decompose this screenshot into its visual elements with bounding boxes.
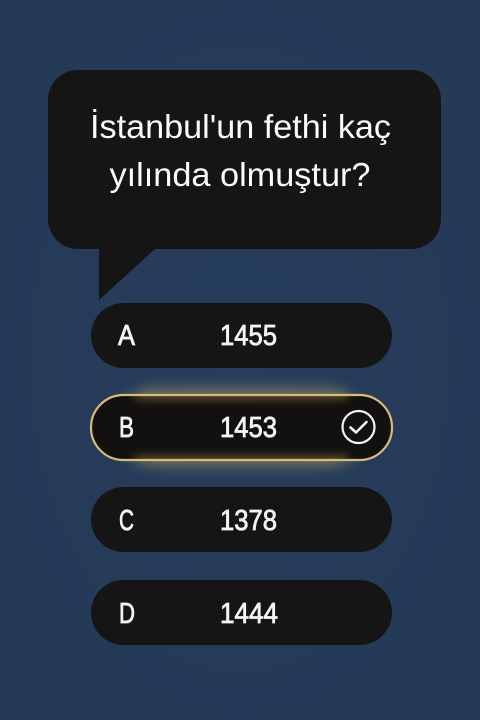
option A: 1455 [220,320,277,352]
speech bubble [48,70,441,300]
option C [91,487,392,552]
gold border [91,395,392,460]
option B: correct answer: B [119,412,134,444]
option A [91,303,392,368]
outer glow [120,388,363,466]
option A: A [118,320,136,352]
option C: 1378 [220,505,277,537]
option D [91,580,392,645]
question text: İstanbul'un fethi kaç [90,108,391,145]
pill [91,395,392,460]
option D: D [119,598,135,630]
question text [90,108,391,193]
question text: yılında olmuştur? [110,156,370,193]
bubble body with tail [48,70,441,300]
option B: correct answer [91,388,392,466]
option D: 1444 [220,598,278,630]
option C: C [119,505,134,537]
icon: check mark in circle [342,411,374,443]
inner glow [130,396,352,459]
option B: correct answer: 1453 [220,412,277,444]
